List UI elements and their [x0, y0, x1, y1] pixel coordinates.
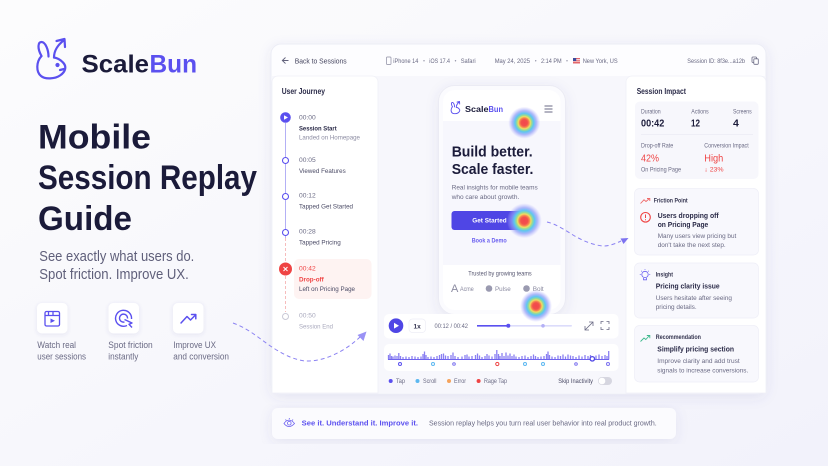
speed button [409, 319, 426, 332]
card: recommendation: Simplify pricing section [657, 345, 734, 354]
event markers [398, 357, 610, 366]
stats card: Duration [641, 108, 661, 116]
heatmap: footer [520, 290, 552, 322]
card: recommendation: signals to increase conversions. [657, 367, 748, 374]
step: session start: Landed on Homepage [299, 134, 360, 142]
icon: rabbit with arrow [37, 39, 65, 78]
icon: target cursor [116, 310, 132, 328]
link: book a demo: Book a Demo [472, 237, 507, 244]
progress bar [477, 324, 572, 328]
stats card: 4 [733, 118, 739, 130]
panel: user journey [272, 76, 378, 393]
brand logo: Scale [82, 50, 149, 78]
feature: improve UX and conversion: Improve UX [173, 340, 216, 350]
title: Mobile [38, 118, 151, 156]
legend: Skip Inactivity [558, 378, 594, 385]
step: session start: 00:00 [299, 114, 316, 122]
card: insight [634, 263, 758, 318]
button: get started: Get Started [472, 218, 507, 225]
icon: alert [641, 212, 650, 222]
stats card: Conversion Impact [704, 142, 749, 150]
hero text: Real insights for mobile teams [452, 184, 538, 192]
step: session end [282, 313, 333, 330]
step: session end: 00:50 [299, 313, 316, 320]
trusted by logos: Pulse [495, 286, 511, 293]
timeline line [284, 123, 286, 238]
stats card: 42% [641, 152, 659, 164]
feature: spot friction instantly [108, 303, 153, 362]
icon: falling trend [640, 198, 650, 204]
trusted by logos: Bolt [533, 286, 544, 293]
subtitle: See exactly what users do. [39, 249, 194, 265]
icon: back arrow [282, 58, 288, 64]
card: friction point: Users dropping off [658, 211, 719, 220]
stats card: Drop-off Rate [641, 142, 674, 150]
icon: hamburger menu [544, 106, 552, 112]
step: drop-off: Left on Pricing Page [299, 286, 355, 293]
stats card: ↓ 23% [704, 166, 724, 174]
icon: video window [45, 312, 60, 326]
feature: watch real user sessions [37, 303, 87, 362]
header bar: Back to Sessions [295, 56, 347, 65]
icons: expand controls [585, 322, 609, 330]
header bar: iPhone 14 [393, 58, 419, 65]
step: tapped get started: 00:12 [299, 193, 316, 200]
icon: eye [284, 418, 294, 426]
stats card [635, 102, 758, 179]
stats card: 12 [691, 118, 700, 130]
step: tapped pricing: 00:28 [299, 229, 316, 236]
legend: Rage Tap [484, 378, 507, 385]
step: drop-off: Drop-off [299, 276, 324, 284]
panel: user journey: User Journey [282, 87, 325, 96]
step: viewed features: Viewed Features [299, 168, 346, 175]
card: friction point: Many users view pricing but [658, 233, 736, 240]
phone logo: Bun [488, 104, 503, 114]
step: drop-off [279, 259, 372, 299]
legend: Error [454, 378, 466, 385]
card: recommendation [634, 326, 758, 382]
feature: watch real user sessions: user sessions [37, 352, 87, 362]
stats card: Screens [733, 108, 752, 116]
legend: Scroll [423, 378, 436, 385]
header bar: Safari [461, 58, 476, 65]
icon: phone [386, 57, 391, 64]
subtitle: Spot friction. Improve UX. [39, 267, 189, 283]
card: recommendation: Improve clarity and add trust [657, 358, 740, 365]
hero text: who care about growth. [451, 194, 519, 201]
trusted by logos [451, 270, 544, 295]
step: session start [280, 112, 360, 142]
feature: improve UX and conversion [173, 303, 229, 362]
header bar: New York, US [583, 58, 618, 65]
stats card: High [704, 152, 723, 164]
hero text [451, 184, 538, 201]
bottom callout: Session replay helps you turn real user behavior into real product growth. [429, 420, 657, 428]
arrow: features to player [233, 323, 366, 361]
step: tapped pricing [282, 229, 341, 246]
card: insight: Users hesitate after seeing [656, 295, 732, 302]
header bar [282, 56, 758, 65]
icon: copy [752, 57, 758, 64]
card: recommendation: Recommendation [656, 334, 701, 341]
icon: US flag [573, 58, 580, 64]
header bar: May 24, 2025 [495, 58, 530, 65]
icon: trend up [181, 314, 196, 323]
icon: green trend [640, 336, 650, 342]
heatmap: get started [507, 203, 542, 238]
panel: session impact: Session Impact [637, 87, 686, 96]
card: friction point: on Pricing Page [658, 220, 708, 229]
player controls [384, 314, 618, 338]
feature: improve UX and conversion: and conversion [173, 352, 229, 362]
phone logo [451, 102, 503, 114]
step: drop-off: 00:42 [299, 266, 316, 273]
card: friction point: don't take the next step. [658, 242, 726, 249]
feature: spot friction instantly: Spot friction [108, 340, 153, 350]
title: Guide [38, 200, 132, 238]
title: Session Replay [38, 159, 257, 197]
card: insight: Insight [656, 272, 674, 279]
header bar: 2:14 PM [541, 58, 562, 65]
header bar: iOS 17.4 [429, 58, 450, 65]
bottom callout [272, 408, 676, 439]
player controls: 00:12 / 00:42 [434, 323, 468, 330]
trusted by logos: Trusted by growing teams [468, 270, 532, 278]
button: get started [452, 211, 530, 230]
hero heading [452, 143, 533, 178]
panel: session impact [626, 76, 766, 393]
step: tapped pricing: Tapped Pricing [299, 240, 341, 246]
phone logo: Scale [465, 104, 489, 114]
card: friction point [634, 188, 758, 255]
brand logo: Bun [150, 50, 197, 78]
step: session end: Session End [299, 324, 333, 330]
legend [389, 377, 612, 385]
step: tapped get started: Tapped Get Started [299, 204, 353, 210]
bottom callout: See it. Understand it. Improve it. [302, 419, 418, 428]
step: viewed features: 00:05 [299, 157, 316, 164]
icon: play button [389, 318, 403, 333]
hero heading: Scale faster. [452, 161, 533, 178]
card: friction point: Friction Point [654, 198, 688, 205]
toggle switch [598, 377, 612, 385]
legend: Tap [396, 378, 405, 385]
brand logo [37, 39, 197, 78]
step: session start: Session Start [299, 125, 337, 132]
arrow: button to friction point [547, 222, 628, 246]
step: viewed features [282, 157, 346, 175]
panel: session replay dashboard [271, 44, 766, 394]
subtitle [39, 249, 194, 283]
stats card: Actions [691, 108, 709, 116]
hero heading: Build better. [452, 143, 533, 160]
feature: spot friction instantly: instantly [108, 352, 139, 362]
trusted by logos: Acme [460, 286, 474, 293]
stats card: On Pricing Page [641, 166, 681, 174]
stats card: 00:42 [641, 118, 664, 130]
trusted by logos: A [451, 283, 459, 295]
title [38, 118, 257, 238]
header bar: Session ID: 8f3e...a12b [687, 58, 745, 65]
feature: watch real user sessions: Watch real [37, 340, 76, 350]
card: insight: Pricing clarity issue [656, 282, 720, 291]
step: tapped get started [282, 193, 353, 210]
timeline waveform [384, 344, 618, 371]
heatmap: menu [508, 107, 540, 139]
card: insight: pricing details. [656, 304, 697, 311]
speed button: 1x [414, 323, 421, 330]
icon: light bulb [640, 269, 650, 280]
phone mockup [438, 86, 566, 314]
